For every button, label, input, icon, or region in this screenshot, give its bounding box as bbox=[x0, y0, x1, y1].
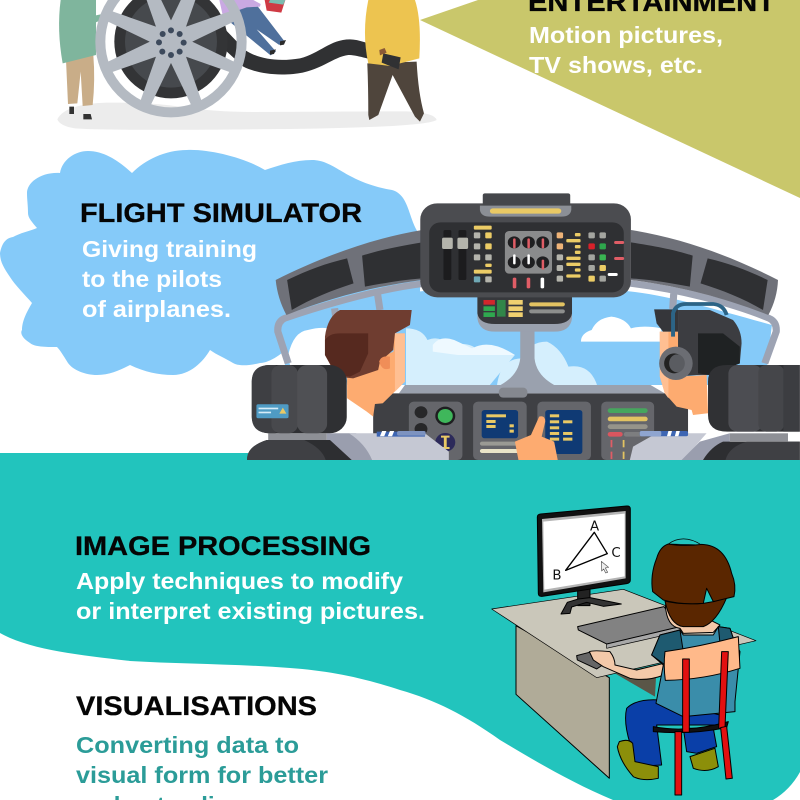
desk bbox=[492, 589, 756, 778]
text: visualisations description: Converting data to bbox=[76, 732, 299, 758]
centre pillar and lower console bbox=[501, 328, 554, 385]
panel: entertainment olive wedge bbox=[420, 0, 800, 198]
right overhead panel bbox=[631, 230, 778, 315]
text: visualisations description: visual form for better bbox=[76, 762, 328, 788]
panel: flight simulator blue cloud bbox=[0, 150, 420, 375]
left seat bbox=[247, 365, 352, 460]
heading: flight simulator: FLIGHT SIMULATOR bbox=[80, 198, 362, 228]
window frame bbox=[278, 283, 776, 363]
text: image processing description: Apply techniques to modify bbox=[76, 568, 403, 594]
left person bbox=[59, 0, 117, 119]
monitor: A bbox=[590, 519, 599, 534]
monitor: B bbox=[552, 569, 561, 584]
text: entertainment description: Motion pictures, bbox=[529, 22, 723, 48]
right person bbox=[365, 0, 424, 122]
left overhead panel bbox=[276, 230, 422, 315]
chair bbox=[653, 637, 740, 795]
text: visualisations description bbox=[76, 732, 328, 800]
main overhead console bbox=[420, 193, 631, 297]
right pilot bbox=[630, 304, 742, 460]
student bbox=[589, 539, 740, 780]
illustration: people carrying a film reel bbox=[57, 0, 437, 130]
right seat bbox=[703, 365, 800, 460]
windscreen sky bbox=[282, 290, 772, 385]
text: image processing description bbox=[76, 568, 425, 624]
pointing hand bbox=[515, 416, 558, 460]
left pilot bbox=[325, 310, 449, 460]
ground shadow bbox=[57, 103, 437, 130]
monitor bbox=[537, 506, 630, 614]
text: image processing description: or interpret existing pictures. bbox=[76, 598, 425, 624]
text: flight simulator description bbox=[82, 236, 257, 322]
mouse bbox=[577, 652, 603, 669]
illustration: student at a computer desk bbox=[492, 506, 756, 795]
heading: image processing: IMAGE PROCESSING bbox=[75, 531, 371, 561]
clouds bbox=[288, 317, 661, 385]
flying person bbox=[219, 0, 286, 55]
monitor: C bbox=[611, 546, 621, 561]
film strip bbox=[220, 24, 401, 74]
text: flight simulator description: to the pilots bbox=[82, 266, 222, 292]
text: entertainment description: TV shows, etc. bbox=[529, 52, 703, 78]
text: flight simulator description: Giving training bbox=[82, 236, 257, 262]
keyboard bbox=[578, 607, 680, 648]
instrument dashboard bbox=[373, 385, 688, 460]
text: flight simulator description: of airplanes. bbox=[82, 296, 231, 322]
text: entertainment description bbox=[529, 22, 723, 78]
film reel bbox=[100, 0, 242, 112]
heading: visualisations: VISUALISATIONS bbox=[76, 691, 317, 721]
panel: teal wave section bbox=[0, 453, 800, 800]
illustration: airplane cockpit bbox=[247, 193, 800, 460]
